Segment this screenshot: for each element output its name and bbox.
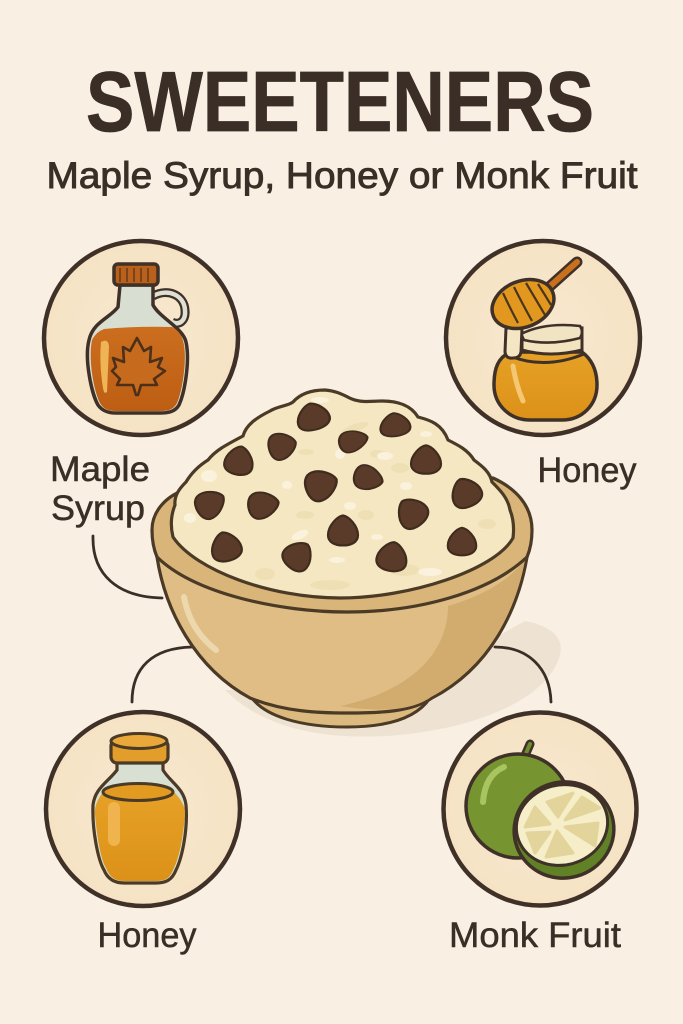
bowl body <box>157 557 527 713</box>
chocolate chips <box>191 399 486 576</box>
label: honey top: Honey <box>538 451 637 490</box>
title: SWEETENERS <box>86 55 594 150</box>
icon: maple syrup bottle <box>44 241 238 435</box>
bowl shaded side <box>340 560 525 709</box>
oatmeal texture <box>184 397 496 590</box>
bowl highlight <box>184 597 216 650</box>
connector: monk fruit <box>495 647 551 702</box>
label: honey bottom: Honey <box>98 916 197 955</box>
icon: honey jar <box>46 712 240 906</box>
oatmeal <box>171 390 514 598</box>
bowl rim <box>152 478 532 612</box>
subtitle: Maple Syrup, Honey or Monk Fruit <box>46 155 638 196</box>
icon: monk fruit <box>444 712 636 906</box>
label: monk fruit: Monk Fruit <box>449 916 621 955</box>
bowl shadow <box>225 621 561 737</box>
connector: maple syrup <box>93 536 162 598</box>
bowl foot <box>252 698 430 727</box>
bowl with oatmeal <box>152 390 532 727</box>
label: maple syrup: Maple <box>50 450 150 489</box>
icon: honey pot and dipper <box>446 241 640 435</box>
label: maple syrup: Syrup <box>51 489 145 528</box>
connector: honey jar <box>132 647 192 702</box>
label: maple syrup <box>50 450 150 528</box>
